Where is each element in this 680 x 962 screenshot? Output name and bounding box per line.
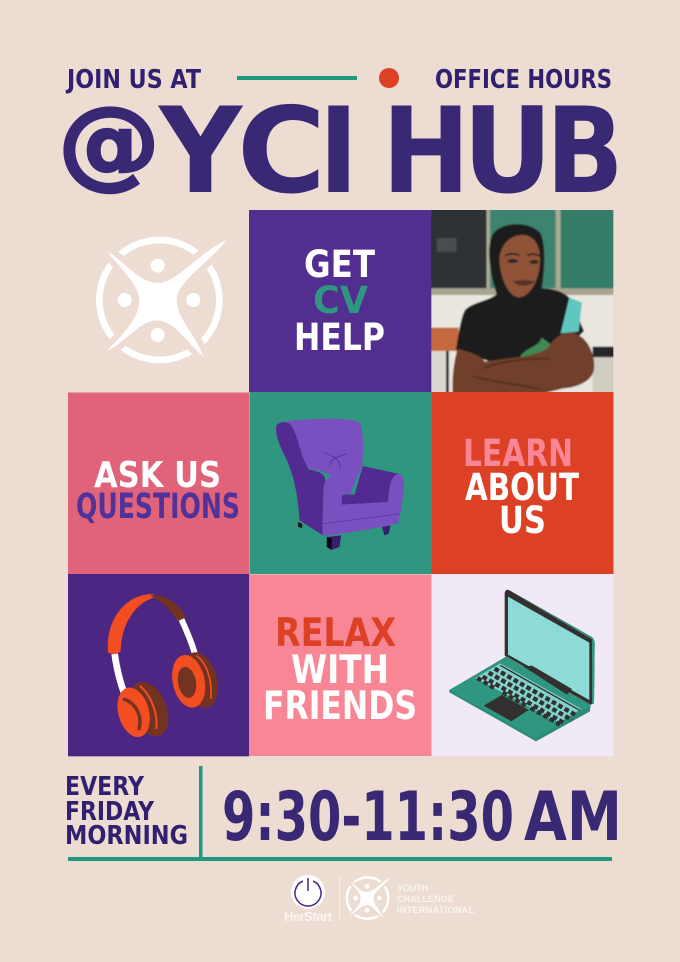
schedule label (65, 772, 188, 851)
title: U (463, 83, 553, 221)
title: B (546, 83, 624, 221)
text: help: HELP (294, 316, 385, 359)
title: Y (157, 83, 244, 221)
panel: learn about us (432, 392, 614, 574)
text: cv: CV (313, 279, 368, 322)
title: H (382, 83, 470, 221)
icon: YCI small logo (347, 877, 391, 919)
text: about: ABOUT (465, 466, 580, 509)
text: questions: QUESTIONS (76, 487, 240, 527)
icon: armchair (276, 419, 404, 550)
panel: get cv help (249, 210, 432, 392)
panel: photo of smiling woman (430, 208, 615, 393)
panel: laptop (432, 575, 614, 756)
panel: ask us questions (68, 392, 249, 574)
text: youth challenge international: INTERNATIONAL (397, 905, 474, 915)
text: relax: RELAX (275, 611, 396, 656)
text: youth challenge international: YOUTH (397, 883, 428, 893)
title (58, 83, 624, 221)
panel: relax with friends (249, 574, 432, 756)
teal rule (237, 76, 357, 80)
schedule label: FRIDAY (65, 797, 155, 827)
text: get: GET (304, 243, 376, 286)
title: C (237, 83, 326, 221)
poster (63, 68, 617, 921)
panel: armchair (250, 392, 432, 574)
title: @ (58, 86, 160, 199)
text: youth challenge international: CHALLENGE (397, 894, 454, 904)
text: office hours: OFFICE HOURS (435, 65, 612, 95)
text: us: US (499, 499, 546, 542)
text: learn: LEARN (463, 432, 573, 475)
icon: headphones (108, 594, 224, 742)
time: AM (524, 778, 622, 857)
icon: laptop (449, 590, 595, 741)
footer logos (284, 875, 474, 924)
time: 9:30-11:30 (222, 778, 514, 857)
text: youth challenge international (397, 883, 474, 915)
schedule label: MORNING (65, 821, 188, 851)
text: ask us: ASK US (94, 455, 221, 496)
text: HerStart: HerStart (284, 909, 333, 924)
text: friends: FRIENDS (263, 684, 417, 729)
schedule label: EVERY (65, 772, 145, 802)
text: with: WITH (291, 648, 389, 693)
red dot (379, 68, 399, 88)
icon: HerStart power button (291, 875, 325, 909)
title: I (318, 83, 358, 221)
icon: YCI logo (99, 240, 227, 360)
header line (65, 65, 612, 95)
panel: headphones (68, 574, 249, 756)
text: join us at: JOIN US AT (65, 65, 201, 95)
